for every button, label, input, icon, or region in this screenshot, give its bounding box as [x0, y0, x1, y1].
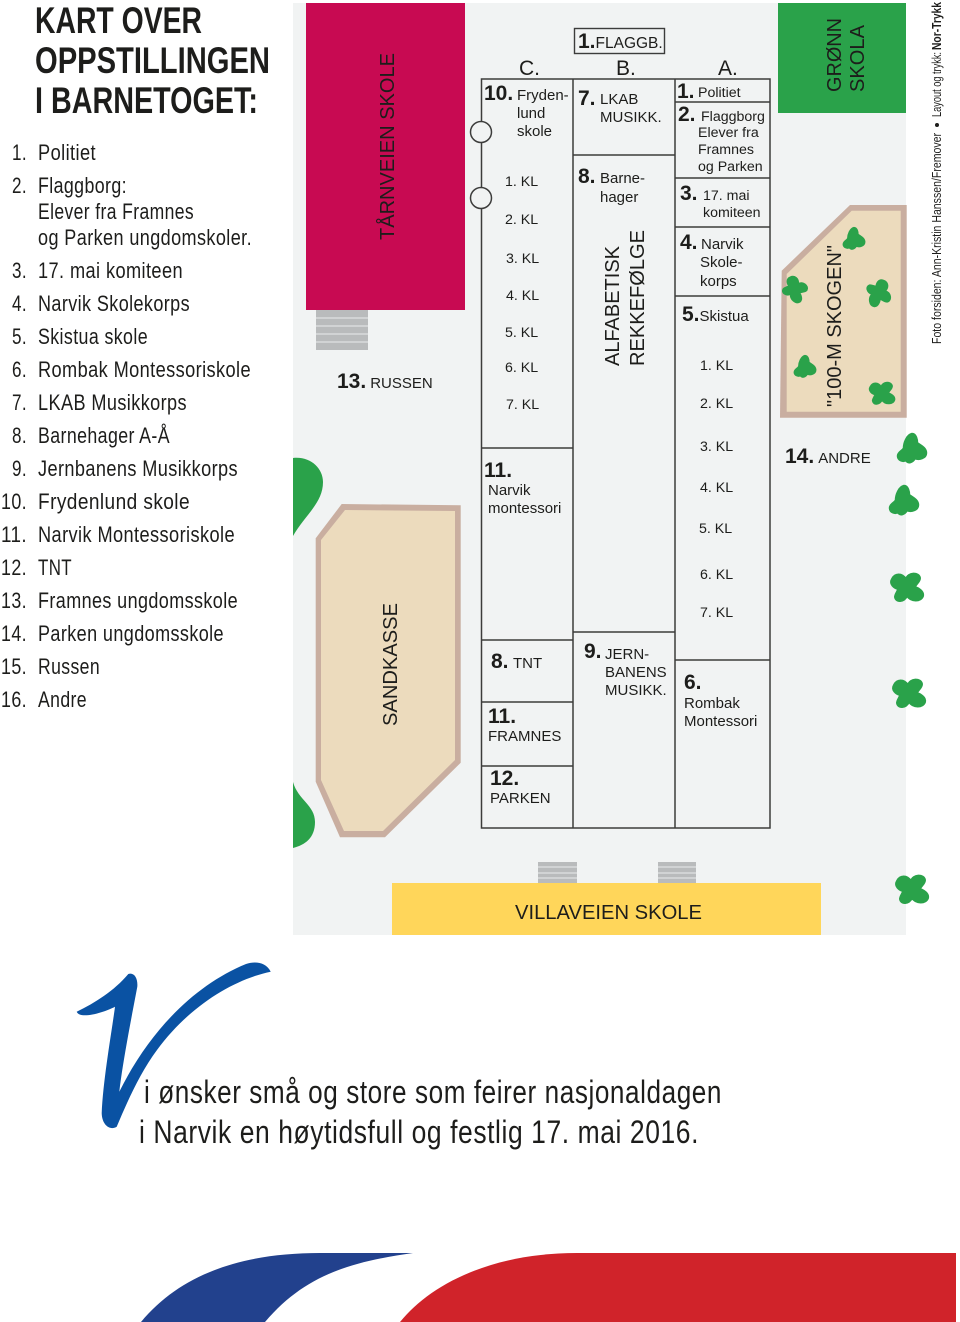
procession order list: TNT [38, 555, 72, 580]
column C labels: montessori [488, 500, 561, 517]
procession order list: 4. [12, 291, 27, 316]
title: I BARNETOGET: [35, 80, 258, 121]
procession order list: 5. [12, 324, 27, 349]
column C labels: 12. [490, 767, 519, 790]
column B labels: JERN- [605, 646, 649, 663]
column C labels: Fryden- [517, 87, 569, 104]
column A labels: 7. KL [700, 605, 733, 621]
Tårnveien skole building: TÅRNVEIEN SKOLE [376, 53, 399, 240]
column B labels: BANENS [605, 664, 667, 681]
greeting text: i Narvik en høytidsfull og festlig 17. mai 2016. [139, 1114, 699, 1150]
Villaveien skole building: VILLAVEIEN SKOLE [515, 901, 702, 924]
procession order list: 15. [1, 654, 27, 679]
label: 14 Andre: 14. ANDRE [785, 445, 871, 468]
column A labels: Framnes [698, 142, 754, 158]
procession order list: LKAB Musikkorps [38, 390, 187, 415]
column A labels: 1. KL [700, 358, 733, 374]
column headings: A. [718, 57, 738, 80]
column C labels: skole [517, 123, 552, 140]
green school field [778, 3, 906, 113]
column C labels: PARKEN [490, 790, 551, 807]
column A labels: 5. KL [699, 521, 732, 537]
steps: Villaveien left [538, 862, 577, 883]
procession order list: Narvik Skolekorps [38, 291, 190, 316]
column B labels: MUSIKK. [605, 682, 667, 699]
steps: Tårnveien [316, 310, 368, 350]
column B labels: 7. [578, 87, 596, 110]
greeting text: i ønsker små og store som feirer nasjonaldagen [144, 1074, 722, 1110]
column C labels: 4. KL [506, 288, 539, 304]
column B labels: MUSIKK. [600, 109, 662, 126]
column A labels: Elever fra [698, 125, 759, 141]
column A labels: og Parken [698, 159, 763, 175]
column C labels: 6. KL [505, 360, 538, 376]
green school field: SKOLA [847, 24, 869, 92]
procession order list: og Parken ungdomskoler. [38, 225, 252, 250]
column headings: C. [519, 57, 540, 80]
Villaveien skole building [392, 883, 821, 935]
green bush top left [293, 458, 323, 536]
column C labels: lund [517, 105, 545, 122]
procession order list: 6. [12, 357, 27, 382]
column C labels: 1. KL [505, 174, 538, 190]
column A labels: 5.Skistua [682, 303, 749, 326]
column A labels: 3. [680, 182, 698, 205]
procession order list: 3. [12, 258, 27, 283]
column C labels: 2. KL [505, 212, 538, 228]
procession order list: Elever fra Framnes [38, 199, 194, 224]
procession order list: 13. [1, 588, 27, 613]
trees along right edge [890, 434, 928, 903]
flag bearer box: 1.FLAGGB. [578, 30, 663, 53]
procession order list: Narvik Montessoriskole [38, 522, 235, 547]
title: OPPSTILLINGEN [35, 40, 270, 81]
procession order list: Skistua skole [38, 324, 148, 349]
column C labels: 3. KL [506, 251, 539, 267]
Tårnveien skole building [306, 3, 465, 310]
sandbox: SANDKASSE [380, 603, 402, 726]
procession order list: 9. [12, 456, 27, 481]
procession order list [1, 140, 252, 712]
procession grid lines [470, 79, 770, 828]
procession order list: Rombak Montessoriskole [38, 357, 251, 382]
procession order list: Jernbanens Musikkorps [38, 456, 238, 481]
column C labels: 5. KL [505, 325, 538, 341]
procession order list: 8. [12, 423, 27, 448]
procession order list: Politiet [38, 140, 96, 165]
column A labels: komiteen [703, 205, 761, 221]
procession order list: 2. [12, 173, 27, 198]
procession order list: 17. mai komiteen [38, 258, 183, 283]
column A labels: 17. mai [703, 188, 750, 204]
procession order list: Andre [38, 687, 87, 712]
column C labels [484, 82, 569, 807]
procession order list: 12. [1, 555, 27, 580]
red swoosh [400, 1253, 956, 1322]
100-m forest [779, 205, 907, 418]
column C labels: 7. KL [506, 397, 539, 413]
column A labels: 6. KL [700, 567, 733, 583]
procession order list: Flaggborg: [38, 173, 127, 198]
procession order list: Parken ungdomsskole [38, 621, 224, 646]
column A labels [677, 80, 765, 730]
column C labels: FRAMNES [488, 728, 561, 745]
title: KART OVER [35, 0, 202, 41]
column A labels: Skole- [700, 254, 743, 271]
procession order list: 11. [1, 522, 27, 547]
column A labels: 3. KL [700, 439, 733, 455]
green school field: GRØNN [824, 18, 846, 92]
column A labels: Montessori [684, 713, 757, 730]
steps: Villaveien right [658, 862, 696, 883]
column B labels: hager [600, 189, 638, 206]
procession order list: 14. [1, 621, 27, 646]
column C labels: 8. [491, 650, 509, 673]
procession order list: 10. [1, 489, 27, 514]
column headings [519, 57, 738, 80]
blue swoosh [141, 1253, 413, 1322]
column C labels: TNT [513, 655, 542, 672]
sandbox [316, 504, 461, 837]
column C labels: 11. [488, 705, 516, 728]
procession order list: Frydenlund skole [38, 489, 190, 514]
column B labels: 9. [584, 640, 602, 663]
procession order list: Framnes ungdomsskole [38, 588, 238, 613]
column A labels: Rombak [684, 695, 740, 712]
procession order list: Russen [38, 654, 100, 679]
map panel [293, 3, 907, 935]
column A labels: 2. KL [700, 396, 733, 412]
column A labels: Politiet [698, 85, 741, 101]
column A labels: Flaggborg [701, 109, 765, 125]
photo and layout credit: Layout og trykk: [930, 52, 944, 117]
photo and layout credit: Foto forsiden: Ann-Kristin Hanssen/Fremover [930, 133, 944, 344]
100-m forest: "100-M SKOGEN" [824, 245, 846, 407]
column A labels: Narvik [701, 236, 744, 253]
column B labels: REKKEFØLGE [627, 230, 649, 366]
column A labels: 1. [677, 80, 695, 103]
column C labels: Narvik [488, 482, 531, 499]
column A labels: 6. [684, 671, 702, 694]
greeting text [139, 1074, 722, 1150]
column C labels: 10. [484, 82, 513, 105]
procession order list: 1. [12, 140, 27, 165]
procession order list: 16. [1, 687, 27, 712]
icon: large blue initial V [77, 963, 271, 1128]
column A labels: 4. KL [700, 480, 733, 496]
column C labels: 11. [484, 459, 512, 482]
title [35, 0, 270, 121]
column B labels: Barne- [600, 170, 645, 187]
column B labels: LKAB [600, 91, 638, 108]
label: 13 Russen: 13. RUSSEN [337, 370, 433, 393]
procession order list: 7. [12, 390, 27, 415]
column B labels: 8. [578, 165, 596, 188]
procession order list: Barnehager A-Å [38, 423, 170, 448]
column A labels: korps [700, 273, 737, 290]
column B labels: ALFABETISK [602, 245, 624, 366]
column B labels [578, 87, 667, 699]
column A labels: 2. [678, 103, 696, 126]
column headings: B. [616, 57, 636, 80]
green bush bottom left [293, 782, 315, 848]
column A labels: 4. [680, 231, 698, 254]
